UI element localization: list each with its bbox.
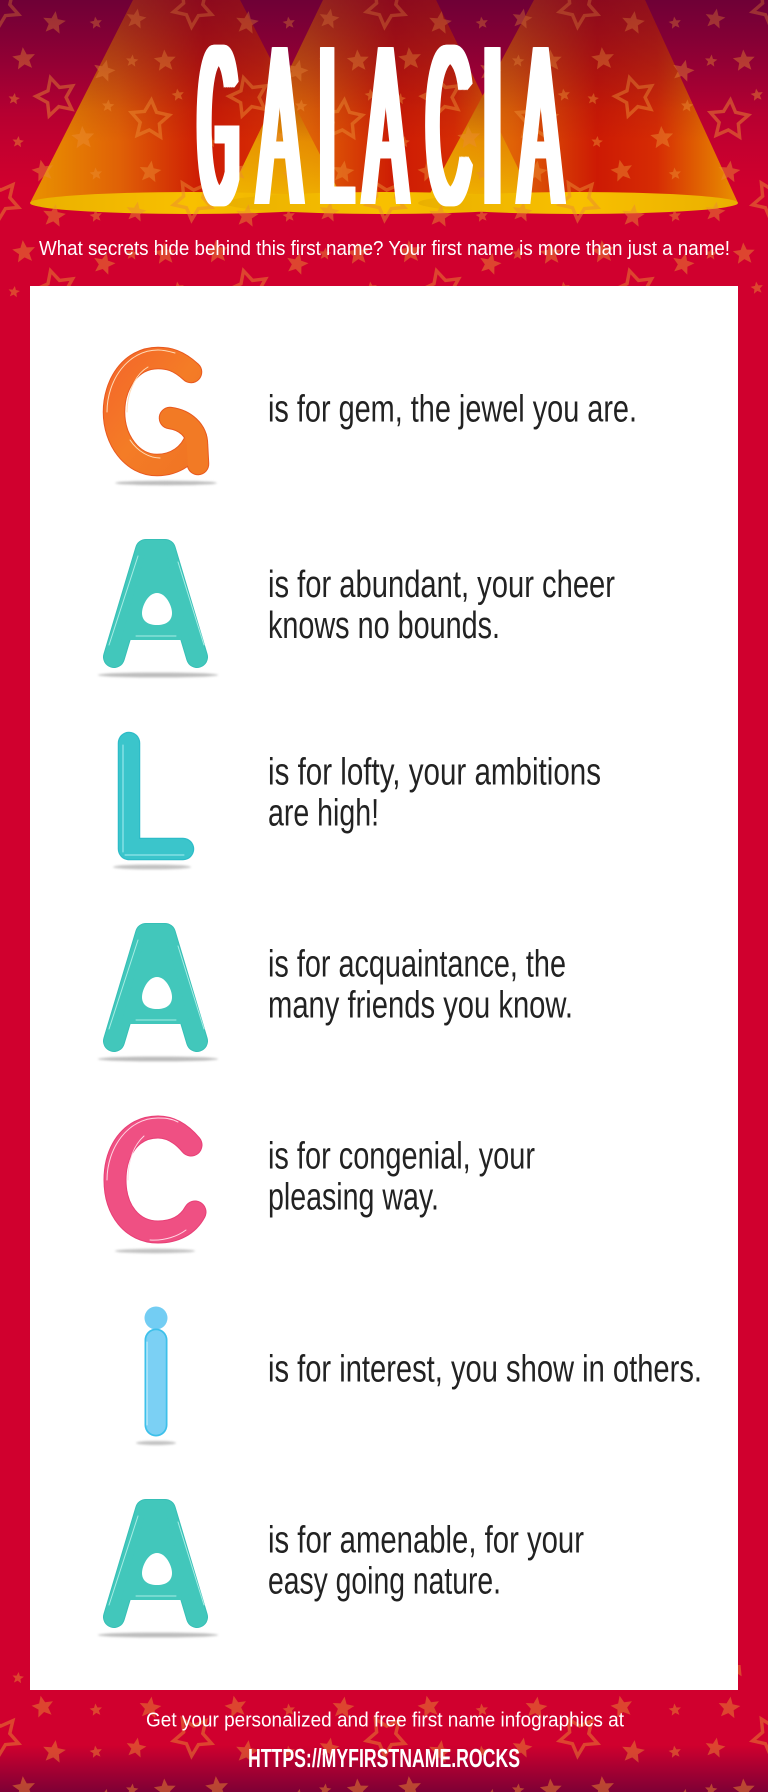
title: G: [194, 0, 232, 253]
title: [194, 0, 566, 253]
title: A: [515, 0, 557, 253]
row: letter i: [136, 1306, 702, 1445]
text: amenable: is for amenable, for your: [268, 1520, 584, 1562]
top star shading: [0, 0, 768, 110]
panel: white content card: [30, 286, 738, 1690]
text: acquaintance: many friends you know.: [268, 984, 573, 1026]
title: C: [422, 0, 466, 253]
text: G line: is for gem, the jewel you are.: [268, 389, 637, 431]
row: letter G: [107, 350, 637, 485]
star pattern: top: [0, 0, 768, 300]
icon: letter G: [107, 350, 217, 485]
spotlight cones: [30, 0, 738, 203]
icon: letter L: [113, 743, 191, 869]
title: A: [254, 0, 296, 253]
text: amenable: easy going nature.: [268, 1560, 501, 1602]
row: letter A (acquaintance): [98, 934, 573, 1061]
text: lofty: is for lofty, your ambitions: [268, 752, 601, 794]
icon: letter A: [98, 934, 218, 1061]
title: A: [360, 0, 402, 253]
text: congenial: is for congenial, your: [268, 1136, 535, 1178]
row: letter C: [107, 1118, 535, 1253]
row: letter A (amenable): [98, 1510, 584, 1637]
icon: letter C: [107, 1118, 195, 1253]
spotlight floor ellipses: [30, 192, 738, 214]
footer url: HTTPS://MYFIRSTNAME.ROCKS: [248, 1743, 520, 1773]
row: letter A (abundant): [98, 550, 615, 677]
title: I: [478, 0, 497, 253]
bottom shading: [0, 1745, 768, 1792]
footer text: Get your personalized and free first name infographics at: [146, 1710, 624, 1732]
text: abundant: knows no bounds.: [268, 605, 500, 647]
icon: letter A: [98, 1510, 218, 1637]
icon: letter A: [98, 550, 218, 677]
text: lofty: are high!: [268, 792, 379, 834]
text: abundant: is for abundant, your cheer: [268, 564, 615, 606]
title: L: [315, 0, 349, 253]
row: letter L: [113, 743, 601, 869]
top shading: [0, 0, 768, 190]
icon: letter i: [136, 1306, 176, 1445]
subtitle: What secrets hide behind this first name? Your first name is more than just a name!: [39, 238, 730, 260]
text: acquaintance: is for acquaintance, the: [268, 944, 566, 986]
text: congenial: pleasing way.: [268, 1176, 439, 1218]
star pattern: bottom: [0, 1665, 768, 1792]
